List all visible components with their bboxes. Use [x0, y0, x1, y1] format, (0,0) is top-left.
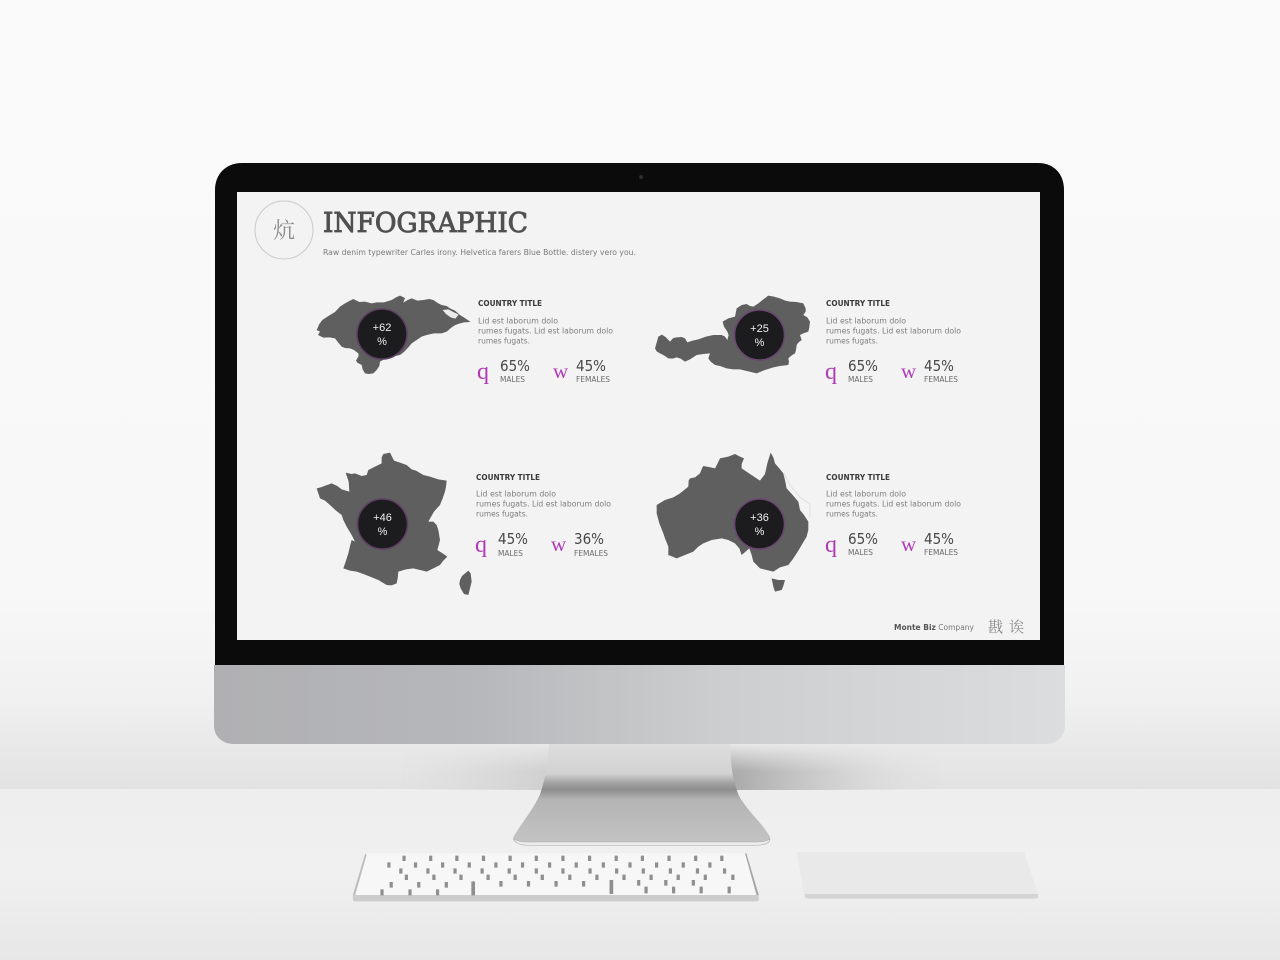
- text block: rumes fugats. Lid est laborum dolo: [476, 500, 611, 508]
- stats: 65%: [848, 530, 878, 548]
- text block: COUNTRY TITLE: [826, 473, 890, 482]
- text block: COUNTRY TITLE: [826, 299, 890, 308]
- panel: Honduras: [317, 296, 613, 385]
- text block: rumes fugats. Lid est laborum dolo: [826, 500, 961, 508]
- stats: FEMALES: [924, 375, 958, 384]
- monitor stand: [513, 743, 770, 845]
- badge: %: [755, 526, 765, 538]
- stats: MALES: [848, 375, 873, 384]
- stats: MALES: [498, 549, 523, 558]
- stats: q: [475, 532, 487, 558]
- stats: q: [825, 532, 837, 558]
- stats: 65%: [848, 357, 878, 375]
- company name: Monte Biz Company: [894, 623, 974, 632]
- title: INFOGRAPHIC: [323, 208, 528, 239]
- text block: COUNTRY TITLE: [476, 473, 540, 482]
- stats: [825, 357, 958, 385]
- stats: 45%: [924, 357, 954, 375]
- text block: Lid est laborum dolo: [826, 490, 906, 498]
- badge: [358, 499, 408, 549]
- camera: [639, 175, 643, 179]
- text block: rumes fugats.: [826, 510, 878, 518]
- badge: +36: [750, 512, 769, 524]
- screen: infographic slide: [237, 192, 1040, 640]
- key gaps: [380, 856, 734, 895]
- text block: Lid est laborum dolo: [476, 490, 556, 498]
- stats: 45%: [576, 357, 606, 375]
- text block: Lid est laborum dolo: [478, 316, 558, 326]
- stats: w: [551, 532, 567, 556]
- text block: rumes fugats.: [476, 510, 528, 518]
- badge: +46: [373, 512, 392, 524]
- map: Austria: [655, 296, 810, 373]
- stats: FEMALES: [924, 548, 958, 557]
- stats: MALES: [500, 375, 525, 384]
- map: France: [317, 453, 472, 595]
- stats: MALES: [848, 548, 873, 557]
- stats: q: [825, 359, 837, 385]
- stats: 45%: [924, 530, 954, 548]
- badge: [357, 309, 407, 359]
- text block: Lid est laborum dolo: [826, 316, 906, 326]
- stats: 65%: [500, 357, 530, 375]
- header: [255, 201, 636, 259]
- stats: 36%: [574, 530, 604, 548]
- footer: [894, 616, 1024, 637]
- stats: [475, 530, 608, 558]
- footer glyphs: 戡 诶: [988, 616, 1024, 637]
- text block: COUNTRY TITLE: [478, 299, 542, 308]
- stats: FEMALES: [576, 375, 610, 384]
- stats: q: [477, 359, 489, 385]
- monitor: [214, 163, 1065, 744]
- trackpad: [797, 852, 1038, 899]
- lagoon: [443, 309, 459, 319]
- badge: [734, 499, 784, 549]
- subtitle: Raw denim typewriter Carles irony. Helvetica farers Blue Bottle. distery vero you.: [323, 248, 636, 257]
- stats: w: [553, 359, 569, 383]
- badge: +62: [373, 322, 391, 334]
- panel: France: [317, 453, 611, 595]
- panel: Australia: [657, 453, 961, 592]
- text block: rumes fugats. Lid est laborum dolo: [826, 326, 961, 336]
- keyboard: [353, 853, 759, 901]
- text block: rumes fugats.: [478, 336, 530, 346]
- text block: rumes fugats. Lid est laborum dolo: [478, 326, 613, 336]
- panel: Austria: [655, 296, 961, 385]
- badge: [734, 310, 784, 360]
- badge: %: [377, 336, 387, 348]
- map: Honduras: [317, 296, 471, 374]
- text block: rumes fugats.: [826, 336, 878, 346]
- logo circle: 炕: [273, 214, 295, 245]
- text block: [826, 299, 961, 346]
- stats: [825, 530, 958, 558]
- stats: w: [901, 532, 917, 556]
- stats: FEMALES: [574, 549, 608, 558]
- text block: [478, 299, 613, 346]
- logo circle: [255, 201, 313, 259]
- text block: [826, 473, 961, 518]
- background: wall and desk: [0, 721, 1280, 960]
- stats: 45%: [498, 530, 528, 548]
- reef line: [784, 473, 810, 517]
- badge: +25: [750, 323, 769, 335]
- badge: %: [378, 526, 388, 538]
- monitor chin: [214, 665, 1065, 744]
- map: Australia: [657, 453, 808, 592]
- stats: [477, 357, 610, 385]
- monitor bezel: [215, 163, 1064, 665]
- text block: [476, 473, 611, 518]
- badge: %: [755, 337, 765, 349]
- stats: w: [901, 359, 917, 383]
